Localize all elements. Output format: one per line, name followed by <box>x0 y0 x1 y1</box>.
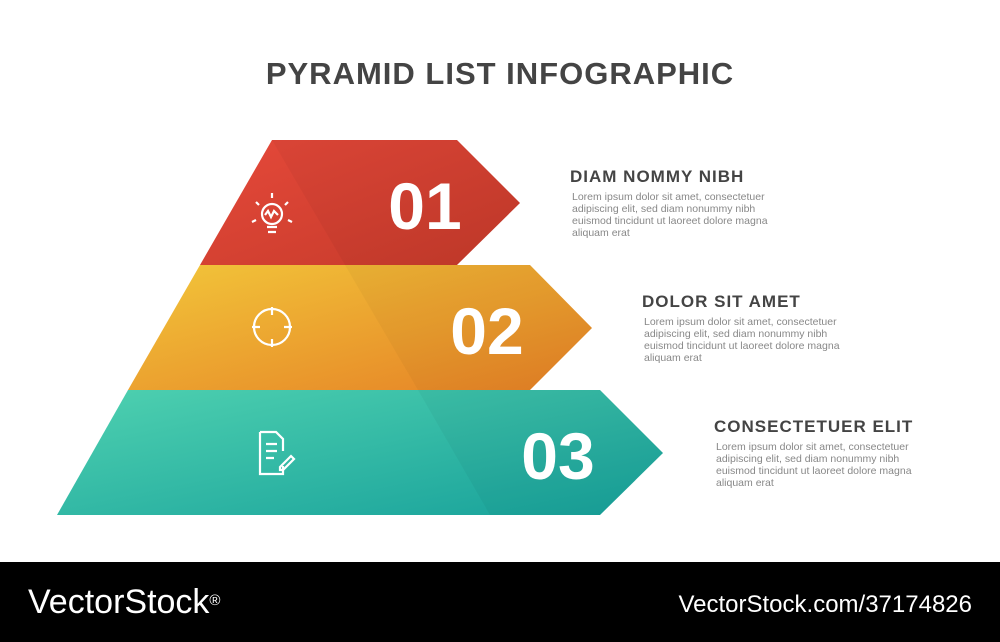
tier 3 <box>57 390 663 515</box>
text block 1: Lorem ipsum dolor sit amet, consectetuer <box>572 191 765 203</box>
text block 1: adipiscing elit, sed diam nonummy nibh <box>572 203 755 215</box>
footer bar: VectorStock.com/37174826 <box>678 591 972 618</box>
tier 1: 01 <box>388 169 462 243</box>
text block 3: aliquam erat <box>716 477 774 489</box>
icon: target <box>252 307 292 347</box>
text block 2: euismod tincidunt ut laoreet dolore magna <box>644 340 840 352</box>
text block 3: Lorem ipsum dolor sit amet, consectetuer <box>716 441 909 453</box>
text block 2: DOLOR SIT AMET <box>642 292 801 311</box>
footer bar: VectorStock® <box>28 583 220 621</box>
text block 2: Lorem ipsum dolor sit amet, consectetuer <box>644 316 837 328</box>
text block 1: DIAM NOMMY NIBH <box>570 167 744 186</box>
tier 1 <box>200 140 520 265</box>
text block 1: aliquam erat <box>572 227 630 239</box>
text block 3: adipiscing elit, sed diam nonummy nibh <box>716 453 899 465</box>
tier 2 <box>128 265 592 390</box>
title: PYRAMID LIST INFOGRAPHIC <box>266 56 734 91</box>
icon: document with pen <box>260 432 294 474</box>
tier 3: 03 <box>521 419 595 493</box>
text block 3: euismod tincidunt ut laoreet dolore magna <box>716 465 912 477</box>
text block 2: aliquam erat <box>644 352 702 364</box>
footer bar <box>0 562 1000 642</box>
text block 3: CONSECTETUER ELIT <box>714 417 913 436</box>
text block 1 <box>570 167 768 239</box>
text block 3 <box>714 417 913 489</box>
icon: lightbulb <box>252 193 292 232</box>
text block 2 <box>642 292 840 364</box>
text block 2: adipiscing elit, sed diam nonummy nibh <box>644 328 827 340</box>
tier 2: 02 <box>450 294 524 368</box>
text block 1: euismod tincidunt ut laoreet dolore magna <box>572 215 768 227</box>
